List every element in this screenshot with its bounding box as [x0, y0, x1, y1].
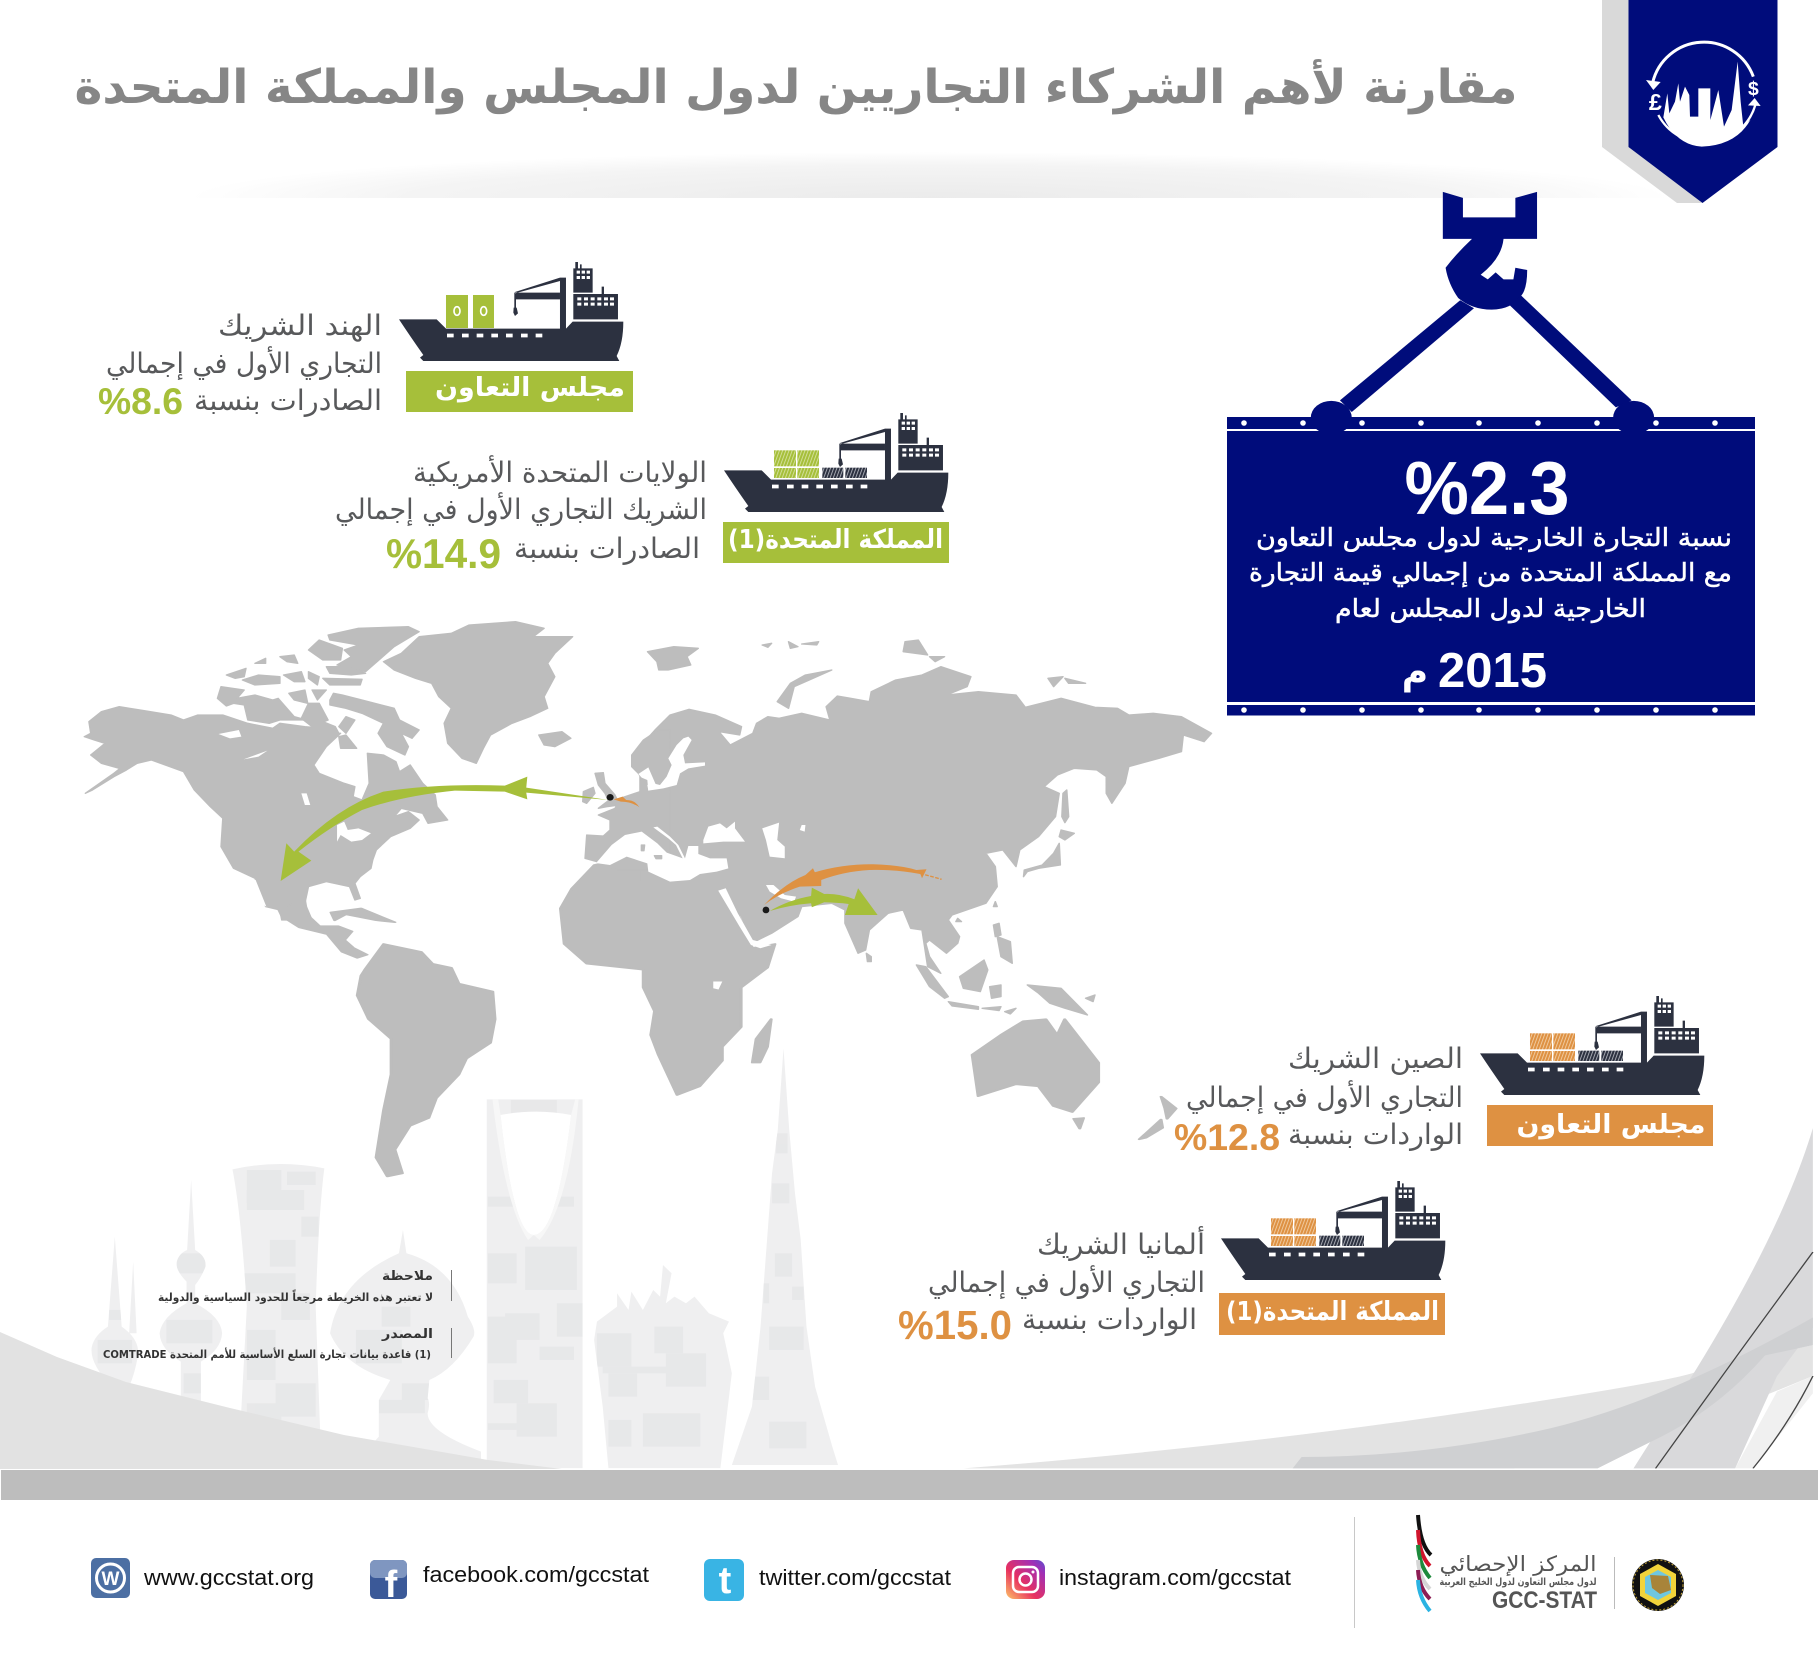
text: [1186, 1042, 1463, 1151]
footer divider: [1354, 1517, 1355, 1628]
title: مقارنة لأهم الشركاء التجاريين لدول المجلس والمملكة المتحدة: [74, 58, 1518, 115]
logo text: [1440, 1552, 1597, 1614]
swoosh: [1418, 1515, 1431, 1611]
text: التجاري الأول في إجمالي: [106, 345, 382, 380]
block: gcc exports india: [98, 262, 633, 422]
note and source: لا تعتبر هذه الخريطة مرجعاً للحدود السياسية والدولية: [158, 1289, 433, 1304]
icon: container ship orange: [1221, 1181, 1445, 1280]
panel description: مع المملكة المتحدة من إجمالي قيمة التجارة: [1249, 558, 1732, 588]
header badge: [1602, 0, 1778, 203]
title band shadow: [352, 162, 1508, 198]
instagram link: instagram.com/gccstat: [1059, 1565, 1291, 1590]
text: الولايات المتحدة الأمريكية: [413, 454, 707, 489]
text: الصين الشريك: [1288, 1042, 1463, 1075]
icon: instagram: [1006, 1560, 1045, 1599]
label bar: [1219, 1293, 1445, 1335]
icon: wordpress: [91, 1558, 130, 1598]
value: %12.8: [1174, 1117, 1280, 1158]
footer links: [91, 1558, 1291, 1606]
label bar: [406, 371, 633, 412]
world map: [84, 622, 1212, 1176]
label bar: مجلس التعاون: [435, 373, 625, 403]
note and source: المصدر: [381, 1327, 433, 1342]
note and source: ملاحظة: [382, 1269, 433, 1284]
south america africa australia: [278, 853, 1176, 1176]
icon: twitter: t: [719, 1560, 732, 1602]
icon: city skyline with currency cycle: [1646, 42, 1761, 147]
block: uk imports germany: [898, 1181, 1445, 1348]
left wave: [0, 1332, 562, 1469]
text: الصادرات بنسبة: [514, 532, 700, 565]
logo text: لدول مجلس التعاون لدول الخليج العربية: [1440, 1577, 1596, 1588]
europe and mediterranean: [583, 730, 745, 882]
label bar: [1487, 1105, 1713, 1146]
icon: facebook: f: [385, 1564, 398, 1606]
icon: facebook: [370, 1560, 407, 1606]
icon: twitter: [704, 1559, 744, 1602]
text: ألمانيا الشريك: [1037, 1225, 1205, 1261]
text: [335, 454, 707, 565]
arrow: gulf trade routes to asia: [763, 864, 942, 915]
icon: city skyline with currency cycle: £: [1649, 89, 1662, 115]
text: التجاري الأول في إجمالي: [1186, 1079, 1463, 1114]
icon: wordpress: W: [102, 1569, 120, 1590]
value: %14.9: [386, 530, 501, 577]
text: [106, 309, 382, 417]
note and source: [103, 1269, 452, 1361]
label bar: مجلس التعاون: [1516, 1110, 1706, 1140]
arrow: gcc exports route to usa: [281, 777, 639, 881]
value: %15.0: [898, 1302, 1012, 1348]
panel description: [1249, 523, 1732, 624]
note and source: (1) قاعدة بيانات تجارة السلع الأساسية للأمم المتحدة COMTRADE: [103, 1347, 431, 1361]
text: الواردات بنسبة: [1022, 1303, 1197, 1336]
block: gcc imports china: [1174, 996, 1713, 1158]
hook and chains: [1311, 192, 1654, 434]
text: الواردات بنسبة: [1288, 1118, 1463, 1151]
twitter link: twitter.com/gccstat: [759, 1565, 951, 1590]
facebook link: facebook.com/gccstat: [423, 1562, 649, 1587]
panel description: نسبة التجارة الخارجية لدول مجلس التعاون: [1256, 523, 1732, 553]
label bar: المملكة المتحدة(1): [728, 525, 943, 555]
text: الشريك التجاري الأول في إجمالي: [335, 491, 707, 526]
logo text: GCC-STAT: [1492, 1587, 1597, 1614]
icon: ship with drums: [399, 262, 623, 361]
bottom grey band: [1, 1470, 1818, 1500]
panel description: الخارجية لدول المجلس لعام: [1335, 594, 1646, 624]
skyline background: [92, 1052, 838, 1468]
big number: %2.3: [1404, 446, 1570, 530]
text: الصادرات بنسبة: [194, 384, 382, 417]
text: الهند الشريك: [218, 309, 382, 342]
icon: container ship green: [724, 413, 948, 512]
americas and arctic: [84, 622, 573, 920]
label bar: المملكة المتحدة(1): [1226, 1297, 1439, 1327]
logo text: المركز الإحصائي: [1440, 1552, 1596, 1576]
right waves: [964, 1128, 1813, 1468]
icon: city skyline with currency cycle: $: [1748, 79, 1759, 100]
value: %8.6: [98, 381, 183, 422]
block: uk exports usa: [335, 413, 949, 577]
label bar: [723, 522, 949, 563]
text: [928, 1225, 1205, 1336]
text: التجاري الأول في إجمالي: [928, 1264, 1205, 1299]
eurasia: [640, 640, 1212, 1015]
year: م: [1402, 652, 1428, 693]
year: 2015: [1438, 644, 1547, 698]
logo: gcc-stat: [1418, 1515, 1684, 1614]
emblem: [1632, 1559, 1684, 1611]
icon: container ship orange: [1480, 996, 1704, 1095]
website: www.gccstat.org: [143, 1565, 314, 1590]
panel: 2.3 percent share: [1227, 417, 1755, 716]
